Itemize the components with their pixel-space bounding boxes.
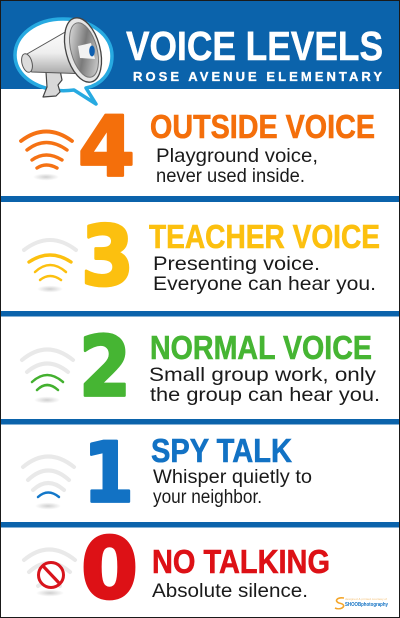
icon: signal arcs yellow (24, 240, 76, 292)
panel: level 0 no talking (24, 520, 330, 618)
panel: level 2 normal voice (22, 318, 380, 416)
numeral 2: 2 (79, 318, 131, 416)
credit logo (335, 597, 389, 609)
heading: NO TALKING (152, 543, 330, 580)
icon: megaphone in speech bubble (15, 14, 112, 104)
panel: level 3 teacher voice (24, 208, 380, 305)
panel: level 1 spy talk: your neighbor. (153, 486, 262, 508)
divider bands (0, 196, 400, 528)
icon: signal arcs green (22, 350, 73, 404)
heading: NORMAL VOICE (150, 329, 372, 366)
heading: SPY TALK (151, 432, 292, 469)
header banner (0, 0, 400, 89)
description: Playground voice, (156, 145, 318, 167)
credit logo: SHOOBphotography (345, 602, 389, 608)
description: Presenting voice. (153, 253, 320, 275)
description: Whisper quietly to (153, 466, 312, 488)
panel: level 2 normal voice: the group can hear you. (150, 384, 380, 406)
icon: signal arcs orange (21, 132, 72, 180)
icon: signal arcs blue (23, 456, 74, 510)
panel: level 4 outside voice: never used inside. (156, 165, 305, 187)
description: Absolute silence. (152, 580, 308, 602)
panel: level 3 teacher voice: Everyone can hear you. (153, 273, 376, 295)
subtitle: ROSE AVENUE ELEMENTARY (133, 69, 382, 84)
numeral 4: 4 (78, 98, 135, 196)
numeral 3: 3 (81, 208, 134, 305)
panel: level 1 spy talk (23, 424, 312, 522)
description: Small group work, only (149, 364, 376, 386)
numeral 0: 0 (81, 520, 138, 618)
panel: level 4 outside voice (21, 98, 375, 196)
numeral 1: 1 (83, 424, 134, 522)
icon: muted signal arcs with prohibition sign (24, 550, 75, 596)
credit logo: designed & printed courtesy of (345, 597, 387, 601)
